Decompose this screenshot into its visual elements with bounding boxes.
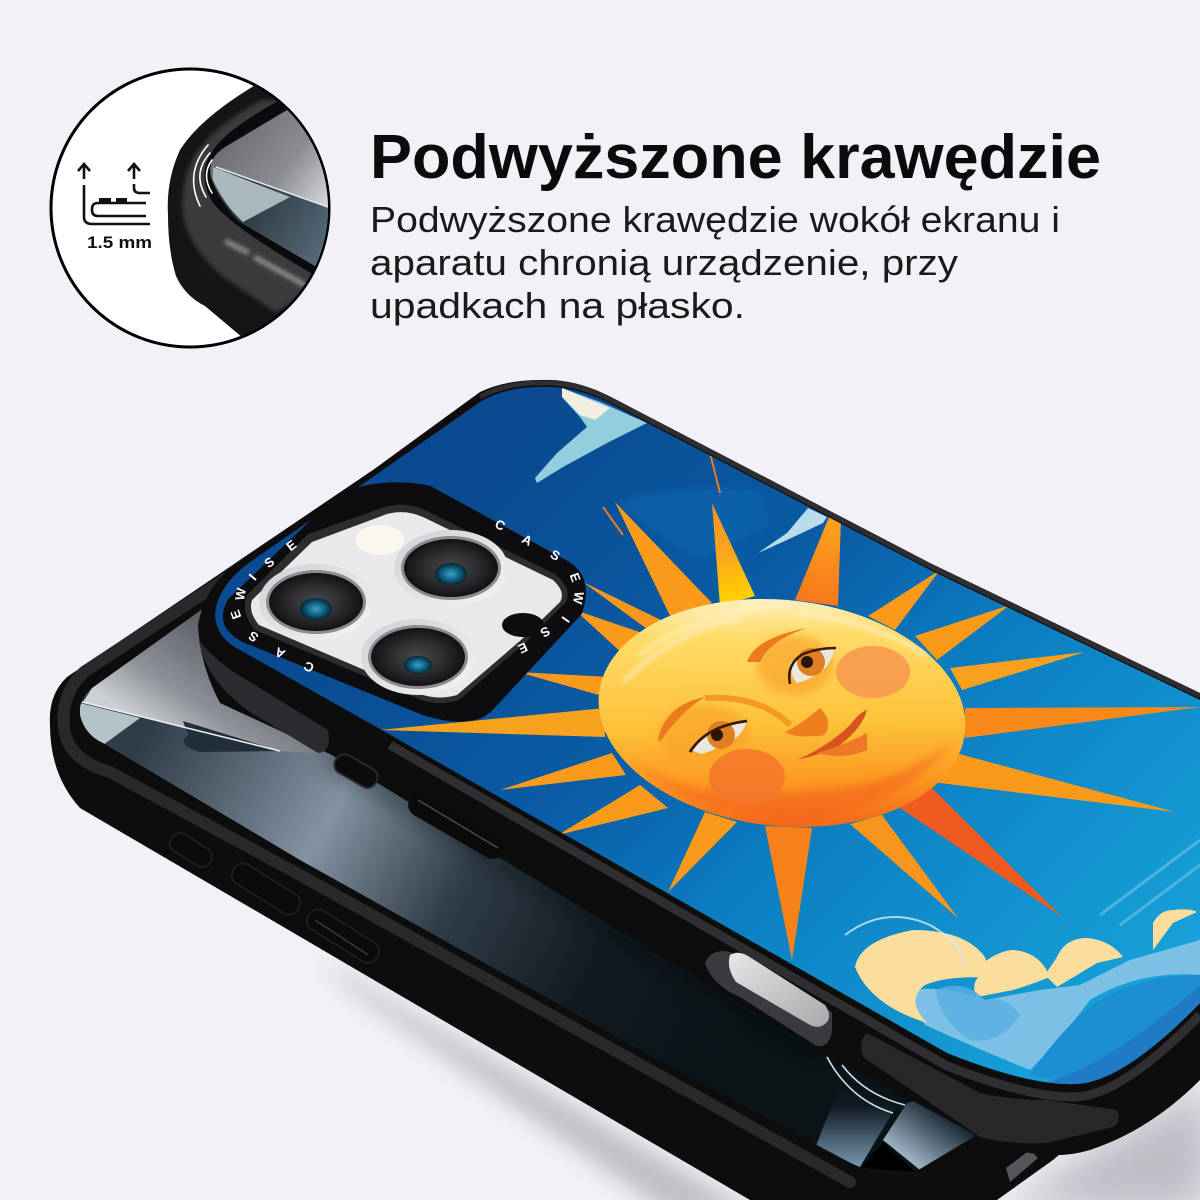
side button [404,787,510,863]
cloud shadow [905,940,1200,1070]
cloud cream big [855,930,990,1023]
lower case speaker grille [1006,1150,1038,1182]
brand ring text: I [246,571,259,583]
camera plateau [251,512,562,698]
cloud cream right [1045,938,1123,987]
screen top reflection [83,610,330,754]
case top rim highlight [480,383,1200,696]
lens: left [259,564,373,640]
flash [356,525,404,555]
brand ring text: E [283,537,300,554]
brand ring text: S [548,546,563,564]
description text: upadkach na płasko. [370,285,745,326]
description text [370,199,1060,326]
brand ring text: S [261,554,278,571]
drop shadow under phones [320,960,1200,1200]
lower eye [690,721,747,754]
cloud cream middle [974,950,1050,997]
brand ring text: E [567,571,584,584]
case ridge bottom right [861,1033,1119,1143]
cloud: small streak [758,508,827,553]
sun face [598,599,966,828]
brand ring text: A [519,531,535,549]
icon: impact arcs [194,145,212,206]
description text: Podwyższone krawędzie wokół ekranu i [370,199,1060,240]
brows [747,628,807,662]
brand ring text: S [245,628,261,645]
silver port [705,951,832,1046]
nose [785,708,828,736]
lower phone in dark case [50,462,1100,1200]
brand ring text: A [272,644,288,662]
corner close-up of the raised edge [168,84,340,338]
deep blue water lower right [1030,975,1200,1085]
zoomed detail circle [51,69,340,347]
mouth [797,710,867,760]
artwork panel [190,370,1200,1100]
upper eye [789,648,836,684]
sun rays [380,453,1200,960]
lower phone screen [80,610,976,1174]
lower case buttons [166,829,383,967]
case edge highlight band [390,745,1200,1097]
brush texture [622,491,763,555]
light wedge [80,703,140,745]
cloud cream far right [1153,909,1197,950]
description text: aparatu chronią urządzenie, przy [370,242,958,283]
lower case highlight band [63,530,850,1182]
case ridge left [199,640,329,753]
sun highlights [625,606,925,680]
icon: raised edge diagram [78,164,150,224]
brand ring text: C [301,658,317,676]
eye sockets [659,635,833,765]
lens: top right [394,530,508,606]
case frame [198,380,1200,1155]
camera bezel [225,484,584,720]
cheeks [836,646,910,698]
brand ring text: C [492,516,508,534]
sun lower streaks [630,740,955,822]
cloud: top [535,388,647,483]
brand ring text: W [232,586,249,602]
lens: bottom [361,619,475,695]
brand ring text: S [537,623,553,641]
brand ring text: I [559,614,573,625]
screen wallpaper shards [815,1090,897,1167]
brand ring text: E [227,608,244,621]
brand ring text: E [516,639,530,657]
camera bezel inner bevel [249,508,564,700]
icon label: 1.5 mm [87,234,152,252]
clouds bottom right [845,840,1200,1085]
upper phone case [190,370,1200,1155]
side switch [331,751,381,791]
camera island [225,484,587,720]
lidar sensor [502,613,544,637]
brand ring text [227,516,587,676]
shadow of upper phone on screen [318,752,599,924]
brand ring text: W [570,590,587,606]
title: Podwyższone krawędzie [370,123,1101,192]
